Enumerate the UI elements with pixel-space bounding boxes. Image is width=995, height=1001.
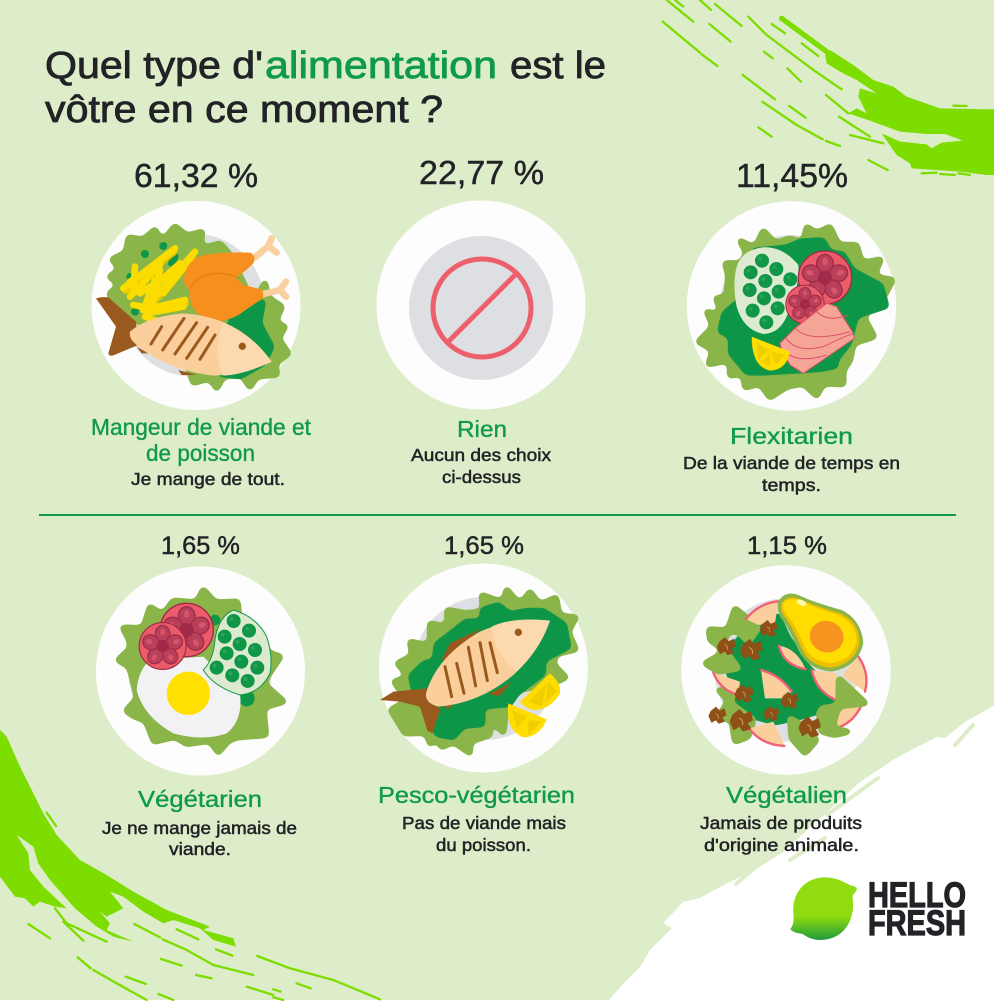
plate: flexitarian — [687, 201, 896, 411]
plate: meat and fish — [92, 201, 300, 410]
label: meat and fish: Mangeur de viande et — [91, 414, 312, 440]
percentage: 11,45%: 11,45% — [736, 157, 848, 194]
label: meat and fish: de poisson — [146, 440, 255, 466]
white corner brush — [608, 705, 995, 1001]
percentage: 1,65 % vegetarian: 1,65 % — [161, 532, 240, 560]
plate: vegan — [681, 565, 891, 775]
label: vegan: Jamais de produits — [700, 813, 862, 833]
label: vegetarian: Je ne mange jamais de — [102, 818, 297, 838]
brush: top right — [663, 0, 994, 175]
label: vegetarian: Végétarien — [138, 786, 262, 812]
label: vegan: Végétalien — [726, 782, 847, 808]
logo: HelloFresh — [790, 876, 966, 943]
label: pescatarian: Pas de viande mais — [402, 813, 566, 833]
title — [45, 45, 606, 131]
logo: HelloFresh: FRESH — [868, 904, 966, 943]
label: flexitarian — [683, 423, 900, 495]
label: meat and fish — [91, 414, 312, 489]
label: meat and fish: Je mange de tout. — [131, 469, 285, 489]
label: none: Aucun des choix — [411, 445, 551, 465]
label: vegan — [700, 782, 862, 855]
title: Quel type d' — [45, 45, 263, 87]
title: vôtre en ce moment ? — [45, 89, 443, 131]
percentage: 1,15 % vegan: 1,15 % — [747, 532, 827, 560]
label: flexitarian: De la viande de temps en — [683, 453, 900, 473]
percentage: 1,65 % pescatarian: 1,65 % — [444, 532, 524, 560]
label: vegan: d'origine animale. — [704, 835, 859, 855]
label: pescatarian: Pesco-végétarien — [378, 782, 575, 808]
icon: lime — [790, 877, 857, 940]
title: alimentation — [265, 45, 497, 87]
label: pescatarian — [378, 782, 575, 855]
label: flexitarian: Flexitarien — [730, 423, 853, 449]
label: pescatarian: du poisson. — [436, 835, 531, 855]
label: none: ci-dessus — [442, 467, 521, 487]
label: none — [411, 416, 551, 487]
label: none: Rien — [457, 416, 507, 442]
label: vegetarian: viande. — [169, 839, 231, 859]
percentage: 61,32 %: 61,32 % — [134, 157, 258, 194]
title: est le — [510, 45, 606, 87]
plate: none (prohibited sign) — [376, 200, 586, 410]
logo: HelloFresh: HELLO — [868, 876, 966, 915]
brush: bottom left — [0, 730, 380, 1000]
percentage: 22,77 %: 22,77 % — [419, 154, 544, 191]
plate: pescatarian — [379, 564, 588, 772]
plate: vegetarian — [96, 566, 305, 776]
label: flexitarian: temps. — [762, 475, 821, 495]
label: vegetarian — [102, 786, 297, 859]
